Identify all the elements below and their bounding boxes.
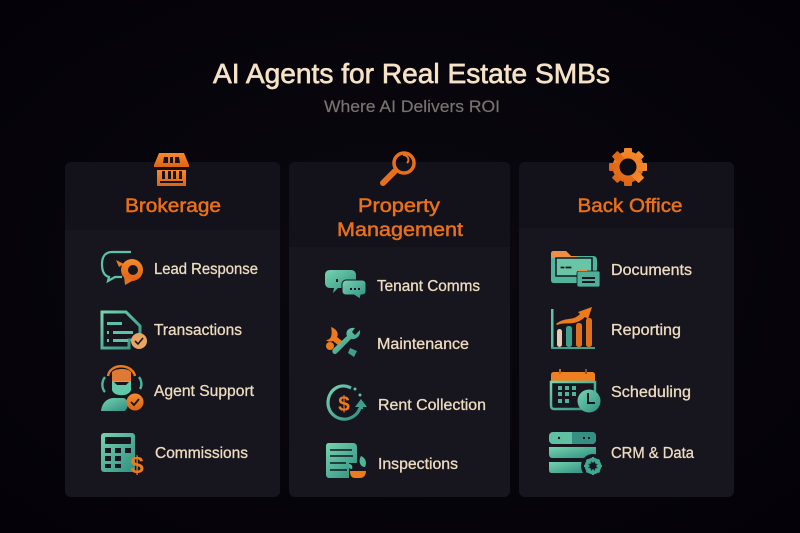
icon: folder with card [551, 251, 600, 287]
item: CRM & Data [549, 432, 694, 478]
icon: dollar cycle [328, 386, 367, 419]
label: Tenant Comms [377, 278, 480, 295]
item: Documents [551, 251, 692, 287]
panel: Back Office [519, 148, 734, 497]
item: Tenant Comms [325, 270, 480, 299]
label: CRM & Data [611, 445, 694, 462]
icon: gear [609, 148, 647, 186]
heading: Brokerage: Brokerage [125, 195, 221, 217]
item: Maintenance [326, 327, 469, 357]
panel background [65, 162, 280, 497]
subtitle: Where AI Delivers ROI [324, 97, 500, 116]
icon: calendar with clock [551, 369, 600, 412]
icon: storefront [154, 153, 189, 186]
panel background [519, 162, 734, 497]
label: Scheduling [611, 384, 691, 401]
item: Reporting [551, 307, 681, 349]
icon: key [383, 153, 414, 183]
icon: lead response chat [102, 252, 143, 285]
title: AI Agents for Real Estate SMBs [213, 58, 610, 89]
label: Commissions [155, 445, 248, 462]
item: Inspections [326, 443, 458, 478]
label: Transactions [154, 322, 242, 339]
panel header band [519, 162, 734, 228]
icon: calculator with dollar [101, 433, 144, 479]
heading: Back Office: Back Office [578, 195, 682, 217]
heading line 2: Management [337, 219, 464, 241]
item: Agent Support [101, 366, 255, 411]
panel header band [289, 162, 510, 247]
icon: calculator with dollar: $ [130, 452, 144, 479]
label: Agent Support [154, 383, 255, 400]
item: Rent Collection [328, 386, 486, 419]
item: Commissions [101, 433, 248, 479]
icon: checklist with bowl [326, 443, 366, 478]
item: Transactions [102, 312, 242, 349]
panel: Property Management [289, 153, 510, 497]
icon: dollar cycle: $ [338, 393, 350, 416]
icon: agent with headset [101, 366, 144, 411]
item: Scheduling [551, 369, 691, 412]
icon: bar chart [551, 307, 595, 349]
icon: document with check [102, 312, 147, 349]
panel background [289, 162, 510, 497]
heading: Property Management: Property [358, 195, 440, 217]
panel header band [65, 162, 280, 230]
label: Lead Response [154, 261, 258, 278]
item: Lead Response [102, 252, 258, 285]
icon: wrench and tools [326, 327, 360, 357]
label: Reporting [611, 322, 681, 339]
label: Documents [611, 262, 692, 279]
panel: Brokerage [65, 153, 280, 497]
icon: chat bubbles [325, 270, 366, 299]
label: Inspections [378, 456, 458, 473]
icon: database with gear [549, 432, 605, 478]
label: Maintenance [377, 336, 469, 353]
label: Rent Collection [378, 397, 486, 414]
